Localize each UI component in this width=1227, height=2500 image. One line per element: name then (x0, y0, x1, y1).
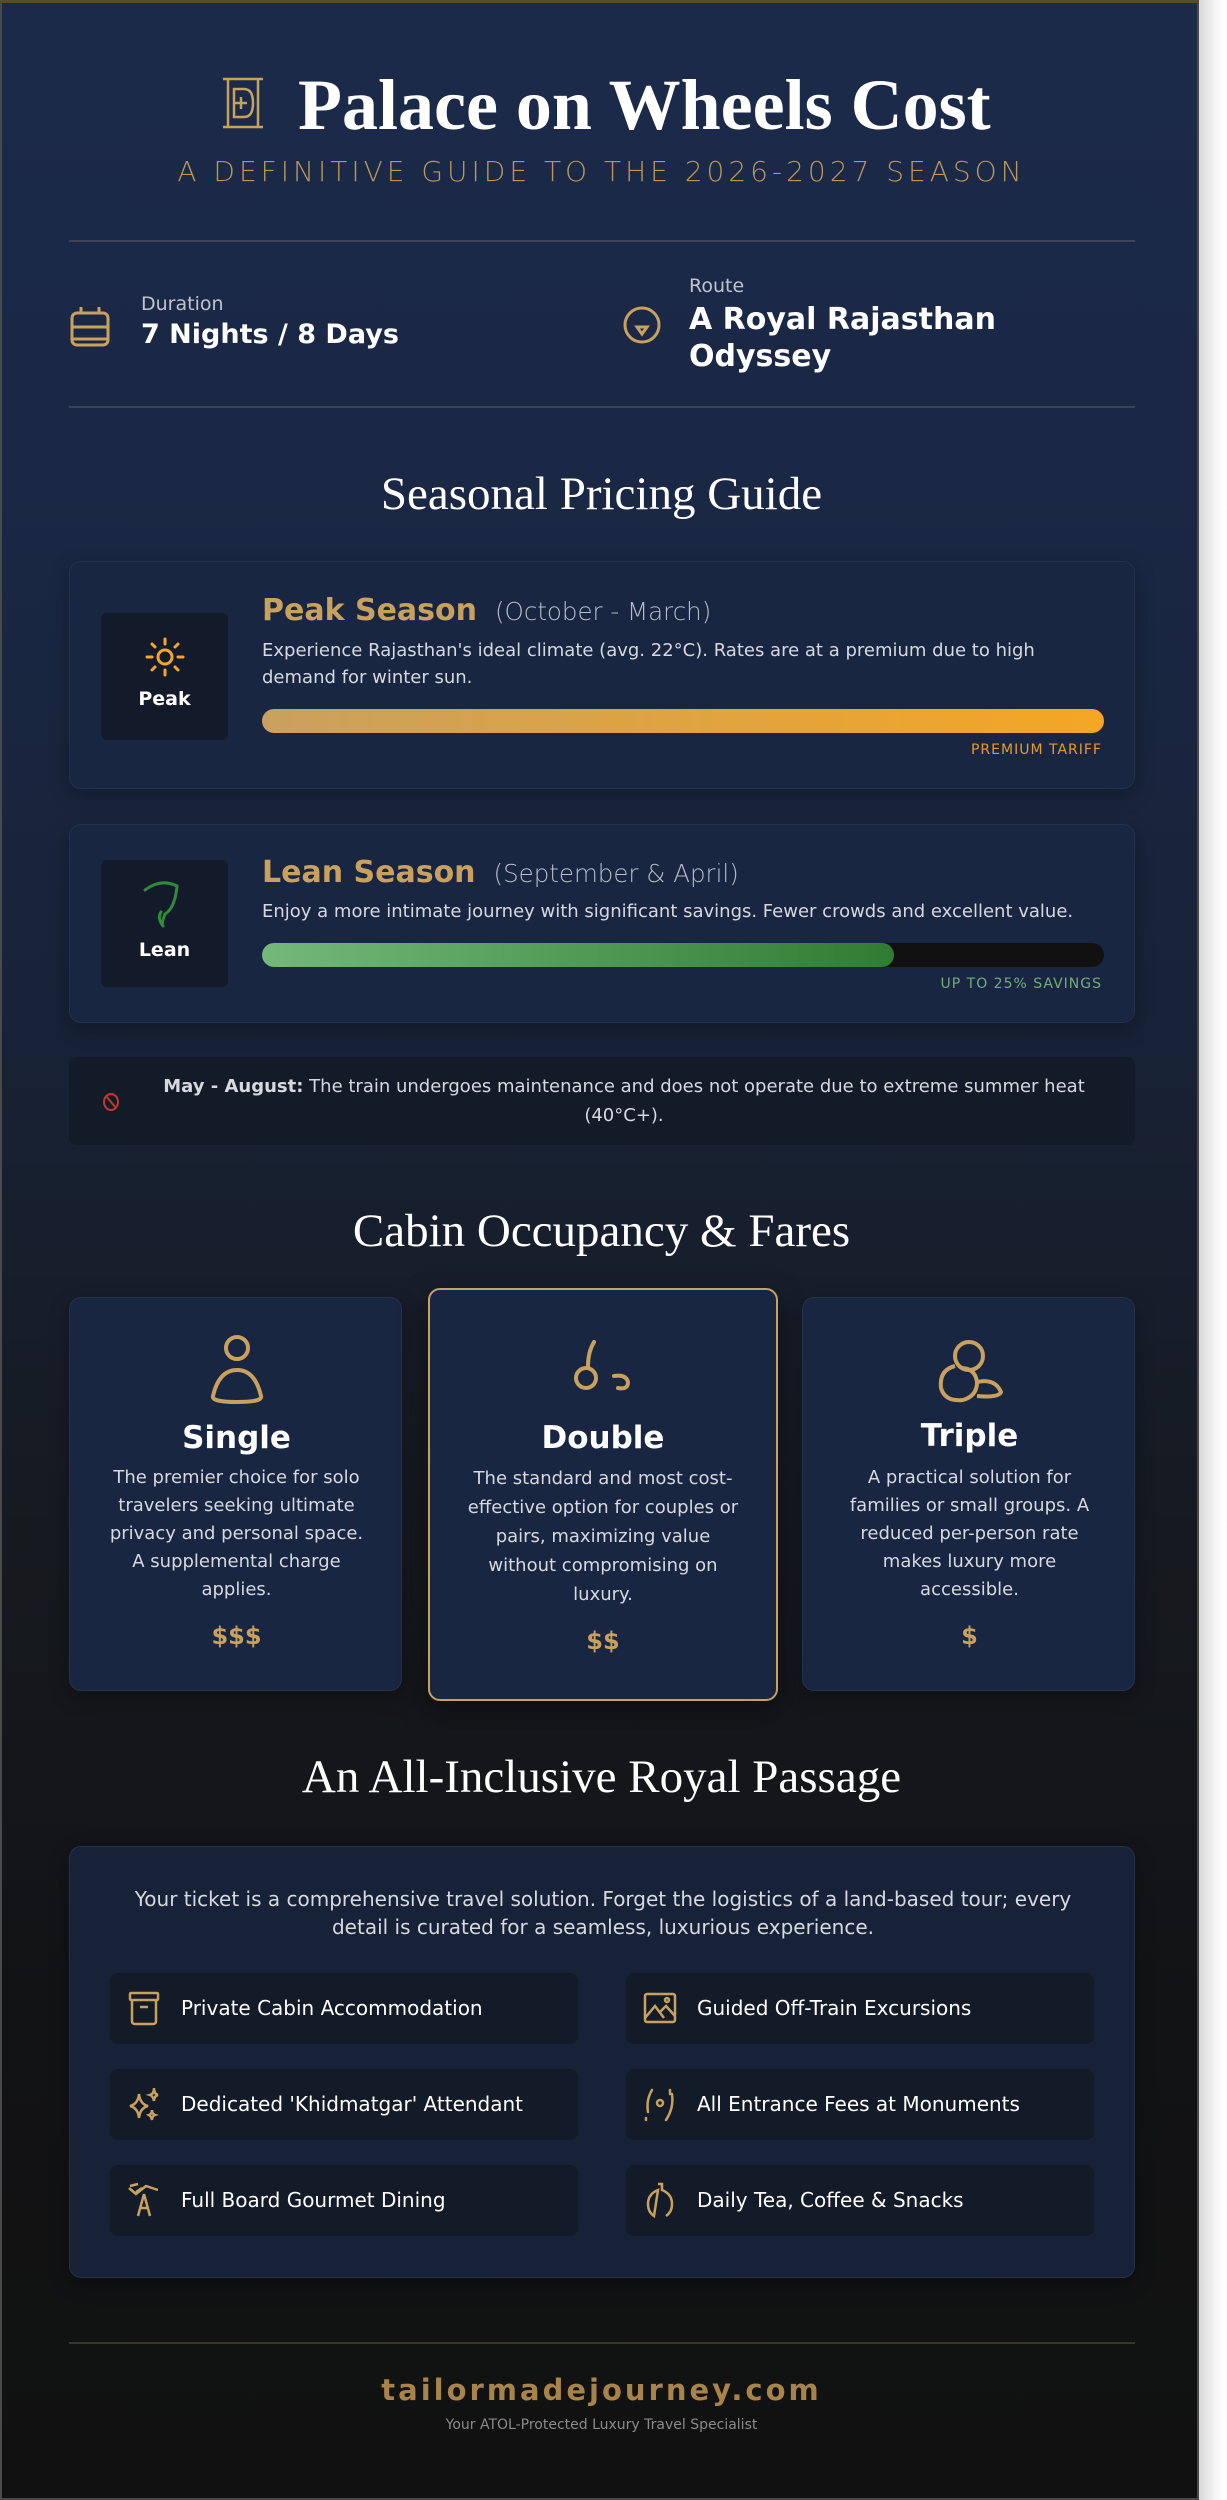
panel: double cabin: Double (542, 1420, 664, 1456)
icon: sun peak (101, 613, 228, 740)
icon: group (938, 1340, 1004, 1402)
footer: tagline: Your ATOL-Protected Luxury Travel Specialist (446, 2417, 757, 2433)
stat: duration: 7 Nights / 8 Days (141, 319, 399, 350)
stat: duration: Duration (141, 293, 224, 315)
panel: lean season: UP TO 25% SAVINGS (941, 976, 1102, 992)
stat: route: A Royal Rajasthan (689, 302, 996, 337)
panel: double cabin (428, 1288, 778, 1701)
bar: premium tariff (262, 709, 1104, 733)
panel: single cabin: The premier choice for solo travelers seeking ultimate privacy and personal space. A supplemental charge applies. (110, 1467, 363, 1600)
icon: leaf lean: Lean (139, 939, 190, 961)
panel: triple cabin (802, 1297, 1135, 1691)
panel: peak season: Experience Rajasthan's ideal climate (avg. 22°C). Rates are at a premium due to high demand for winter sun. (262, 640, 1035, 688)
item: guided excursions: Guided Off-Train Excursions (697, 1996, 971, 2020)
panel: lean season: Enjoy a more intimate journey with significant savings. Fewer crowds and excellent value. (262, 901, 1073, 922)
stat: route: Route (689, 275, 744, 297)
panel: triple cabin: A practical solution for families or small groups. A reduced per-person rate makes luxury more accessible. (850, 1467, 1089, 1600)
panel: single cabin: $$$ (211, 1622, 262, 1650)
stat: route (624, 275, 996, 374)
item: private cabin: Private Cabin Accommodation (181, 1996, 483, 2020)
panel: triple cabin: $ (961, 1622, 978, 1650)
item: private cabin (110, 1973, 578, 2044)
subtitle: A DEFINITIVE GUIDE TO THE 2026-2027 SEASON (177, 155, 1026, 188)
panel: lean season: Lean Season (September & April) (262, 855, 739, 890)
panel: inclusions (69, 1846, 1135, 2278)
callout: closed season: May - August: The train undergoes maintenance and does not operate due to extreme summer heat (40°C+). (163, 1076, 1085, 1126)
item: entrance fees (626, 2069, 1094, 2140)
panel: triple cabin: Triple (921, 1418, 1018, 1454)
item: attendant: Dedicated 'Khidmatgar' Attendant (181, 2092, 523, 2116)
item: tea: Daily Tea, Coffee & Snacks (697, 2188, 964, 2212)
icon: sun peak: Peak (138, 688, 191, 710)
item: attendant (110, 2069, 578, 2140)
footer: brand: tailormadejourney.com (381, 2373, 822, 2407)
item: guided excursions (626, 1973, 1094, 2044)
icon: two people (574, 1340, 630, 1390)
panel: double cabin: The standard and most cost-effective option for couples or pairs, maximizing value without compromising on luxury. (468, 1468, 738, 1605)
icon: palace emblem (223, 78, 263, 128)
icon: single person (210, 1335, 264, 1404)
item: dining (110, 2165, 578, 2236)
stat: route: Odyssey (689, 339, 831, 374)
icon: leaf lean (101, 860, 228, 987)
bar: savings (262, 943, 1104, 967)
icon: map pin (624, 306, 660, 344)
heading: seasonal pricing: Seasonal Pricing Guide (381, 468, 822, 520)
panel: peak season: PREMIUM TARIFF (971, 742, 1102, 758)
panel: single cabin (69, 1297, 402, 1691)
panel: peak season: Peak Season (October - March) (262, 593, 711, 628)
panel: peak season (69, 561, 1135, 789)
title: Palace on Wheels Cost (298, 65, 991, 145)
heading: all-inclusive: An All-Inclusive Royal Passage (302, 1751, 901, 1803)
icon: prohibited (103, 1093, 119, 1111)
icon: calendar (70, 307, 110, 346)
item: entrance fees: All Entrance Fees at Monuments (697, 2092, 1020, 2116)
stat: duration (70, 293, 399, 350)
item: dining: Full Board Gourmet Dining (181, 2188, 446, 2212)
panel: single cabin: Single (182, 1420, 291, 1456)
callout: closed season (69, 1057, 1135, 1145)
text: intro: Your ticket is a comprehensive travel solution. Forget the logistics of a land-based tour; every detail is curated for a seamless, luxurious experience. (135, 1887, 1071, 1939)
heading: cabin occupancy: Cabin Occupancy & Fares (353, 1205, 850, 1257)
panel: double cabin: $$ (586, 1627, 620, 1655)
panel: lean season (69, 824, 1135, 1023)
item: tea (626, 2165, 1094, 2236)
